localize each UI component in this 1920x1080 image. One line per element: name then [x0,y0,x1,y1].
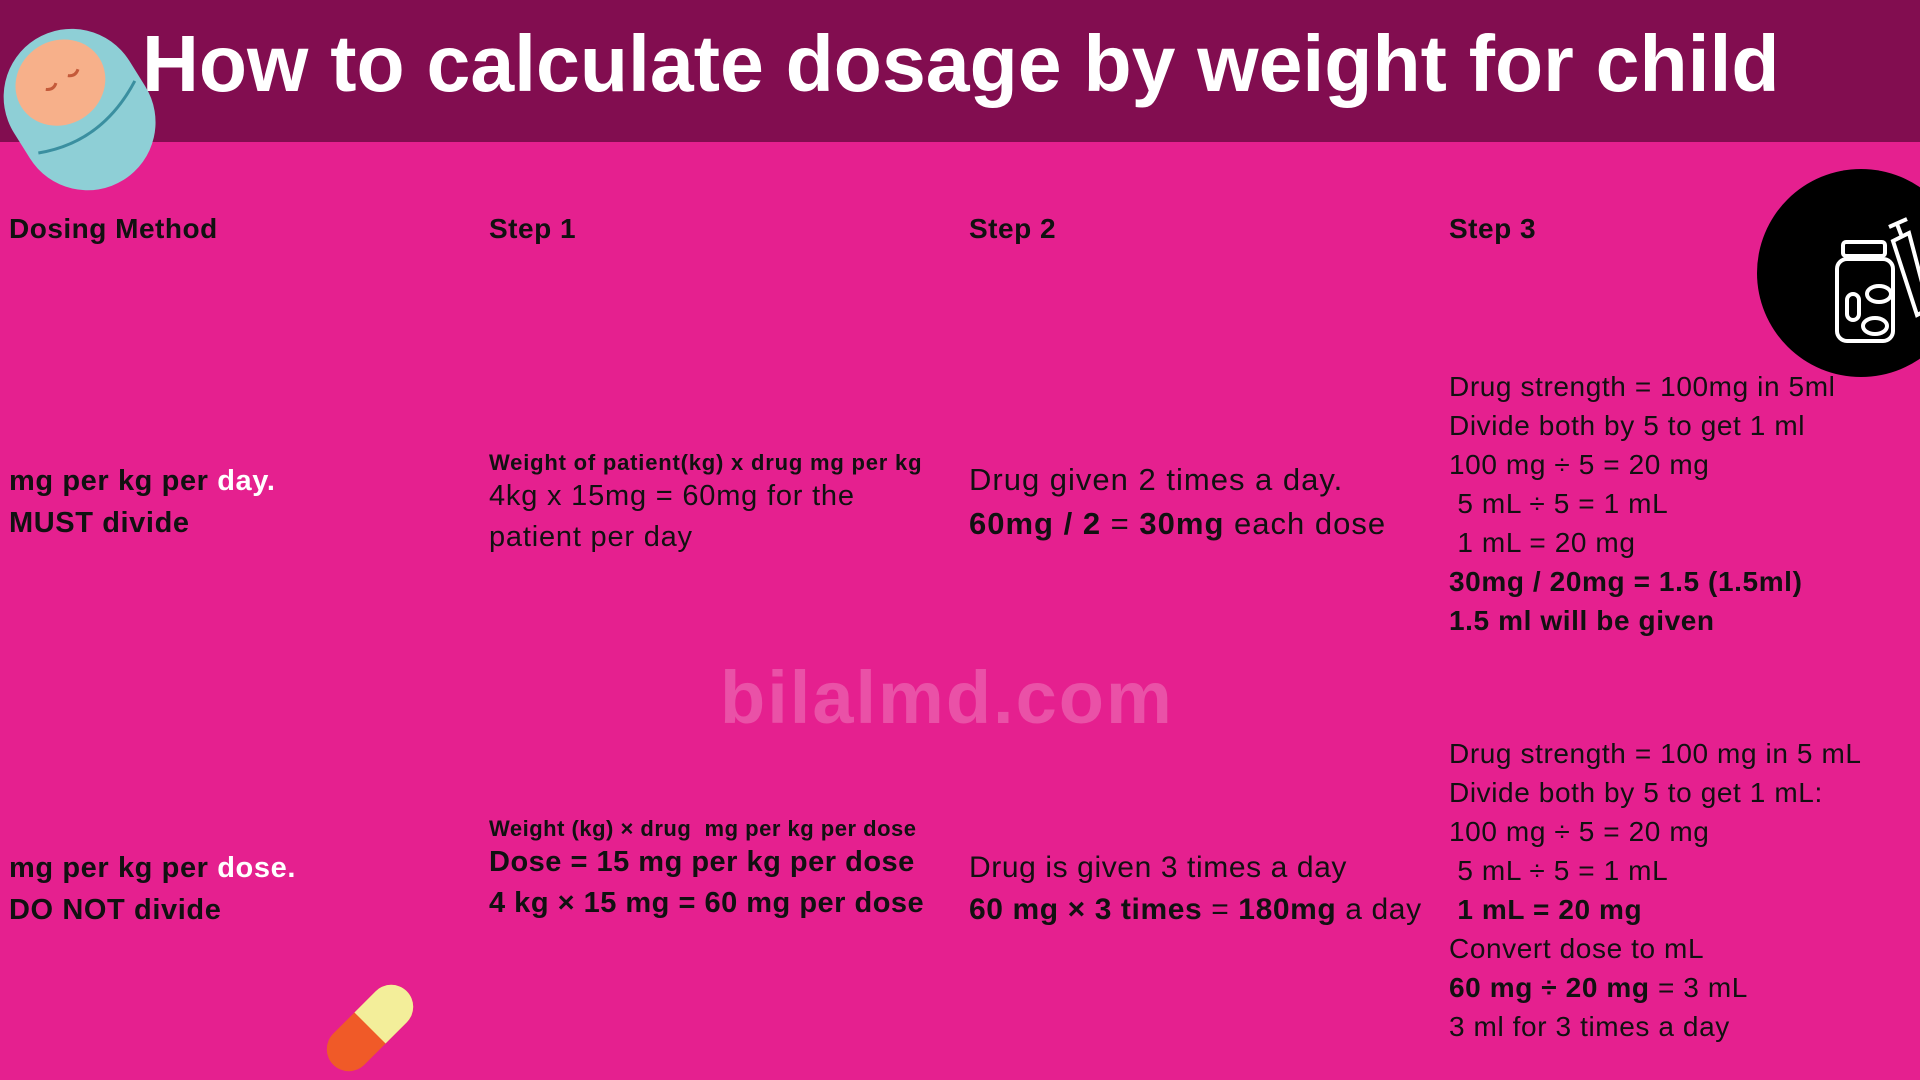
row2 step1: 4 kg × 15 mg = 60 mg per dose [489,887,924,919]
row1 step3: Drug strength = 100mg in 5ml [1449,371,1835,402]
text: Step 2 [969,213,1056,244]
row1 step2 [969,462,1386,541]
row2 step3: 5 mL ÷ 5 = 1 mL [1457,855,1668,886]
row1 step1: 4kg x 15mg = 60mg for the [489,480,855,512]
row2 step3: 1 mL = 20 mg [1457,894,1642,925]
header bar [0,0,1920,142]
row2 step1: Weight (kg) × drug mg per kg per dose [489,816,916,841]
row2 step3: 60 mg ÷ 20 mg = 3 mL [1449,972,1748,1003]
row1 step3: 5 mL ÷ 5 = 1 mL [1457,488,1668,519]
row2 step1 [489,816,924,919]
row1 method: MUST divide [9,507,190,539]
row1 method [9,465,276,539]
row2 step1: Dose = 15 mg per kg per dose [489,846,915,878]
row2 step3: 3 ml for 3 times a day [1449,1011,1730,1042]
text: Step 3 [1449,213,1536,244]
row1 step1: Weight of patient(kg) x drug mg per kg [489,450,922,475]
row1 step2: Drug given 2 times a day. [969,462,1343,497]
column headers: Dosing Method [9,213,218,244]
row1 method: mg per kg per day. [9,465,276,497]
title: How to calculate dosage by weight for child [142,19,1780,108]
row1 step1: patient per day [489,521,693,553]
row2 step3: Drug strength = 100 mg in 5 mL [1449,738,1862,769]
row1 step1 [489,450,922,553]
watermark: bilalmd.com [720,656,1174,739]
row1 step3: Divide both by 5 to get 1 ml [1449,410,1805,441]
row2 step3: Convert dose to mL [1449,933,1704,964]
row2 step2 [969,851,1422,926]
row2 step2: 60 mg × 3 times = 180mg a day [969,893,1422,926]
row1 step3: 1 mL = 20 mg [1457,527,1636,558]
row1 step3: 1.5 ml will be given [1449,605,1715,636]
row1 step2: 60mg / 2 = 30mg each dose [969,506,1386,541]
row2 method [9,852,296,926]
icon: baby [4,28,156,190]
row2 method: DO NOT divide [9,894,221,926]
row2 step2: Drug is given 3 times a day [969,851,1347,884]
row1 step3: 100 mg ÷ 5 = 20 mg [1449,449,1709,480]
row1 step3 [1449,371,1835,636]
row2 step3: Divide both by 5 to get 1 mL: [1449,777,1823,808]
text: Step 1 [489,213,576,244]
row2 method: mg per kg per dose. [9,852,296,884]
icon: pill [326,984,414,1072]
icon: medicine circle [1757,169,1920,377]
row1 step3: 30mg / 20mg = 1.5 (1.5ml) [1449,566,1802,597]
row2 step3: 100 mg ÷ 5 = 20 mg [1449,816,1709,847]
row2 step3 [1449,738,1862,1042]
